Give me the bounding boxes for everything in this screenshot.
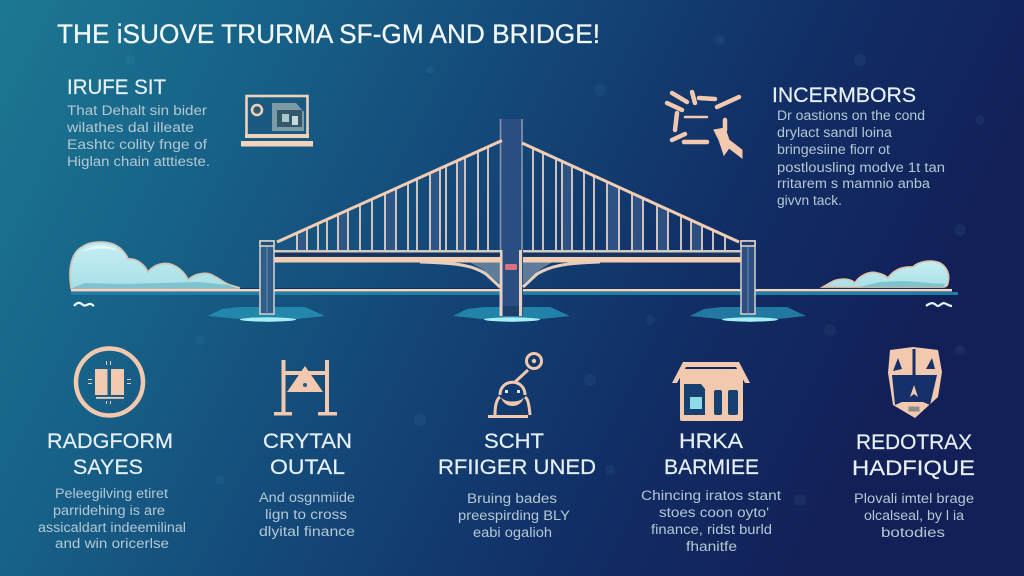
column 2	[259, 360, 355, 539]
heading: column 5: HADFIQUE	[852, 457, 975, 480]
icon: robot arm	[488, 354, 542, 418]
heading: column 1: SAYES	[73, 456, 143, 479]
left pier	[260, 241, 274, 314]
body: column 2	[259, 490, 355, 539]
column 4	[641, 362, 781, 554]
wave left	[74, 303, 94, 306]
body: column 5	[854, 491, 974, 540]
body: column 3: preespirding BLY	[458, 508, 570, 523]
central tower	[500, 119, 523, 316]
heading: column 1: RADGFORM	[47, 430, 173, 453]
body: top left	[66, 103, 210, 169]
heading: column 1	[47, 430, 173, 479]
heading: column 5	[852, 431, 975, 480]
body: top right	[777, 108, 945, 208]
body: column 3: eabi ogalioh	[473, 525, 552, 540]
body: column 4: fhanitfe	[686, 539, 737, 554]
column 5	[852, 347, 975, 540]
body: column 5: Plovali imtel brage	[854, 491, 974, 506]
body: column 2: dlyital finance	[259, 524, 355, 539]
icon: storefront	[672, 362, 750, 421]
heading: column 4: HRKA	[679, 430, 743, 453]
body: column 5: olcalseal, by l ia	[864, 508, 965, 523]
heading: top left: IRUFE SIT	[67, 76, 166, 99]
body: column 1	[38, 486, 186, 551]
body: column 5: botodies	[881, 525, 945, 540]
red car	[505, 264, 517, 270]
heading: column 3: RFIIGER UNED	[438, 456, 596, 479]
suspension cables	[277, 140, 739, 242]
body: top left: Eashtc colity fnge of	[67, 137, 207, 152]
heading: column 4: BARMIEE	[664, 456, 759, 479]
body: column 3: Bruing bades	[467, 491, 557, 506]
cloud left	[70, 242, 240, 288]
body: column 3	[458, 491, 570, 540]
body: column 1: parridehing is are	[53, 503, 165, 518]
road deck	[274, 250, 741, 262]
body: top left: wilathes dal illeate	[66, 120, 194, 135]
body: column 4: Chincing iratos stant	[641, 488, 781, 503]
icon: laptop	[241, 96, 313, 146]
body: top left: That Dehalt sin bider	[67, 103, 208, 118]
gusset shading	[470, 262, 552, 284]
body: top right: postlousling modve 1t tan	[777, 160, 945, 175]
heading: column 2: OUTAL	[270, 456, 345, 479]
bridge illustration	[70, 119, 958, 322]
icon: bridge tower triangle	[274, 360, 337, 416]
hanger panels	[297, 157, 702, 251]
icon: book in circle	[76, 348, 143, 416]
body: top right: Dr oastions on the cond	[777, 108, 925, 123]
arch struts	[420, 262, 600, 287]
heading: column 5: REDOTRAX	[856, 431, 972, 454]
body: top left: Higlan chain atttieste.	[67, 154, 210, 169]
body: column 4: stoes coon oyto'	[659, 505, 769, 520]
body: column 4: finance, ridst burld	[651, 522, 772, 537]
heading: column 2	[263, 430, 352, 479]
body: top right: rritarem s mamnio anba	[777, 176, 931, 191]
title: THE iSUOVE TRURMA SF-GM AND BRIDGE!	[57, 19, 600, 49]
icon: broken ring with hand	[667, 92, 742, 158]
body: column 2: And osgnmiide	[259, 490, 355, 505]
body: top right: drylact sandl loina	[777, 125, 893, 140]
wave right	[926, 303, 952, 306]
heading: column 3	[438, 430, 596, 479]
body: top right: givvn tack.	[777, 193, 842, 208]
panel: top right text	[772, 84, 945, 208]
heading: column 3: SCHT	[484, 430, 544, 453]
column 1	[38, 348, 186, 551]
heading: column 2: CRYTAN	[263, 430, 352, 453]
cloud right	[823, 261, 949, 287]
icon: shield mask	[888, 347, 942, 418]
body: top right: bringesiine fiorr ot	[777, 142, 890, 157]
waterline	[71, 288, 958, 295]
body: column 2: lign to cross	[265, 507, 347, 522]
right pier	[741, 241, 755, 314]
heading: top right: INCERMBORS	[772, 84, 916, 107]
panel: top left text	[66, 76, 210, 169]
body: column 1: assicaldart indeemilinal	[38, 520, 186, 535]
body: column 4	[641, 488, 781, 554]
body: column 1: and win oricerlse	[55, 536, 169, 551]
column 3	[438, 354, 596, 540]
hangers	[297, 147, 725, 251]
water glow under piers	[208, 307, 806, 322]
heading: column 4	[664, 430, 759, 479]
body: column 1: Peleegilving etiret	[55, 486, 168, 501]
